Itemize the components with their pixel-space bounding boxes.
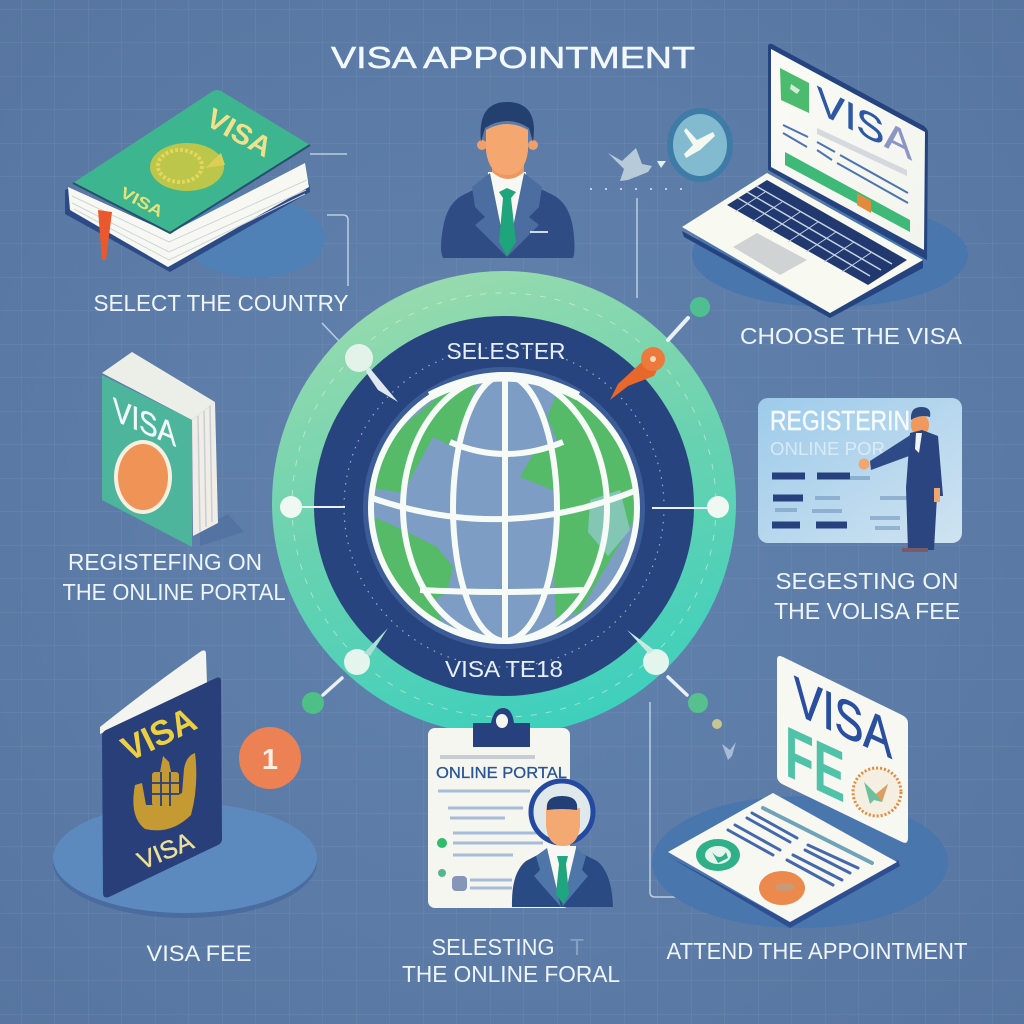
visa fee document: FE [785,710,845,819]
icon: laptop: VISA [817,77,912,169]
panel: registering on the online portal [62,352,286,605]
label: SELECT THE COUNTRY [94,290,348,316]
figure: presenter [858,407,943,552]
panel: select the country [65,90,348,316]
panel: selesting the online foral [402,708,620,987]
label: ATTEND THE APPOINTMENT [666,938,968,964]
card: online portal: REGISTERIN [770,405,910,436]
clipboard [428,708,570,908]
icon: green visa book [65,90,310,272]
clipboard: ONLINE PORTAL [436,765,567,782]
visa fee document [777,656,908,843]
label: THE ONLINE FORAL [402,961,620,987]
icon: navy passport: VISA [115,700,203,769]
platform [53,806,317,918]
label [774,568,960,624]
label: REGISTEFING ON [68,549,262,575]
label [402,934,620,987]
node markers [280,297,736,760]
platform [652,796,948,928]
icon: airplane and clock badge [590,108,733,189]
icon: green visa book: VISA [201,102,277,163]
platform [185,198,325,278]
card: online portal: ONLINE POR [770,439,885,459]
ring label top: SELESTER [446,338,566,364]
icon: green passport with orange stamp: VISA [113,391,176,454]
label: THE ONLINE PORTAL [62,579,286,605]
outer green ring [272,271,736,735]
badge: number 1: 1 [262,744,278,776]
label: SEGESTING ON [776,568,958,594]
label: T [570,934,584,960]
icon: laptop [682,44,928,318]
panel: choose the visa [682,44,968,349]
title: VISA APPOINTMENT [331,40,695,75]
icon: green passport with orange stamp [102,352,244,547]
label: SELESTING [432,934,554,960]
panel: segesting on the volisa fee [758,398,962,624]
ring label bottom: VISA TE18 [445,656,563,682]
card: online portal [758,398,962,543]
navy ring [314,316,694,696]
panel: visa fee [53,650,317,966]
laptop base form [668,793,900,928]
icon: green visa book: VISA [117,185,166,221]
globe [366,373,650,643]
panel: attend the appointment [652,656,968,964]
label: CHOOSE THE VISA [740,323,963,349]
label: VISA FEE [146,941,252,966]
connector lines [310,154,712,897]
icon: navy passport: VISA [133,827,198,876]
visa fee document: VISA [794,666,892,771]
icon: person in magnifier [512,781,613,907]
central globe badge [272,271,736,760]
label [62,549,286,605]
label: THE VOLISA FEE [774,598,960,624]
icon: person in suit [441,102,574,258]
icon: navy passport [100,650,222,898]
platform [692,203,968,307]
badge: number 1 [239,727,301,789]
